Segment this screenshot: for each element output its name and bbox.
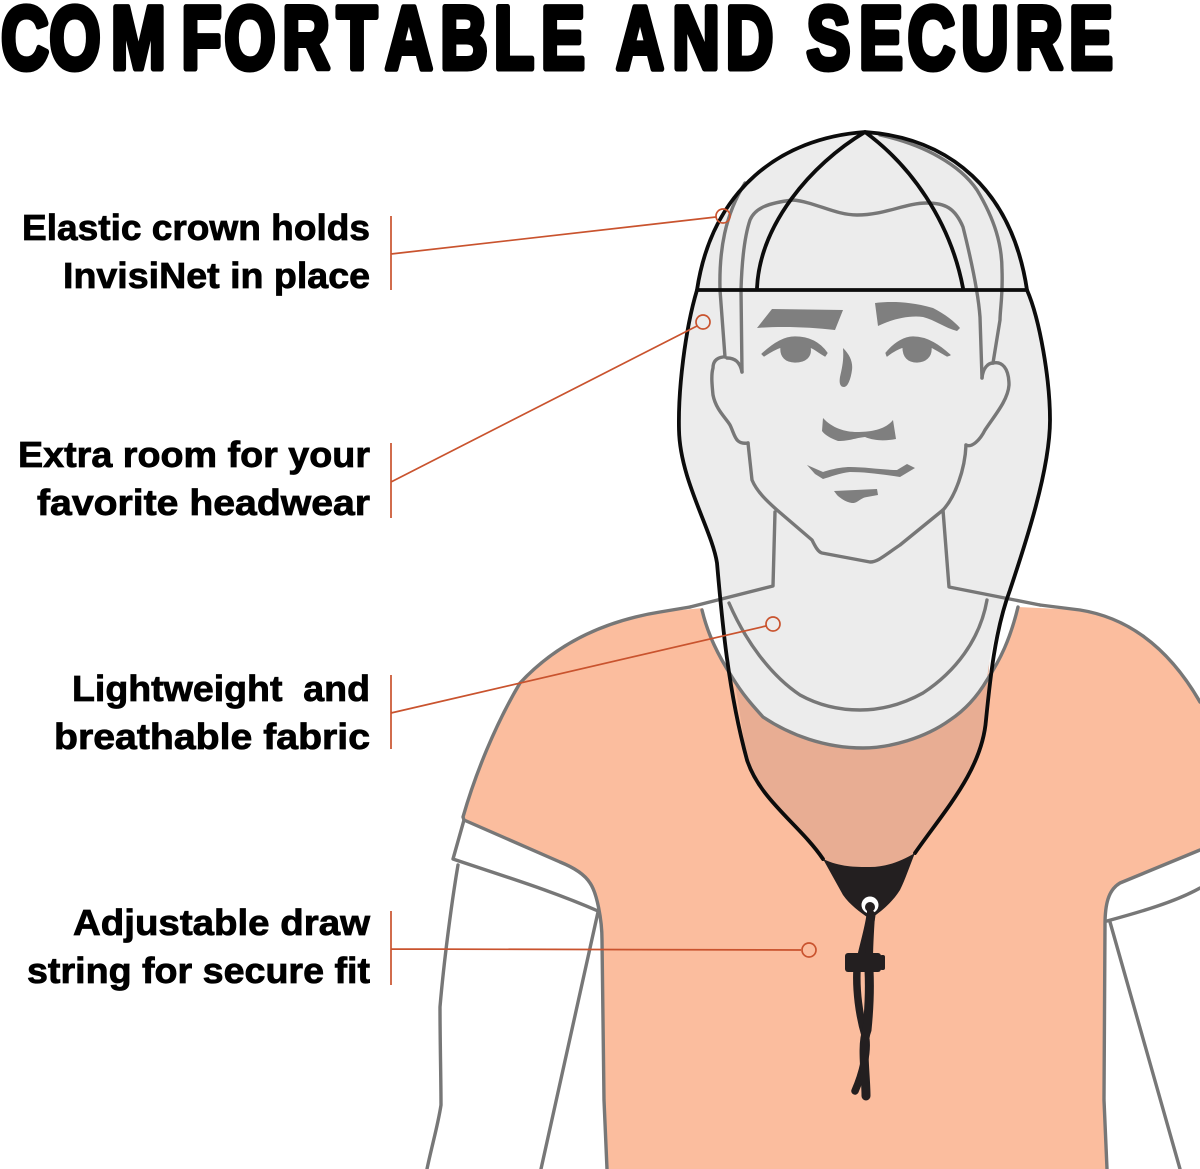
- label: draw string: string for secure fit: [27, 950, 370, 991]
- label: lightweight fabric: [54, 668, 370, 757]
- nose: [822, 348, 896, 441]
- label: extra room: favorite headwear: [37, 482, 370, 523]
- drawstring cord: [855, 915, 871, 1096]
- neck and shoulder lines: [690, 510, 1040, 710]
- label: draw string: [27, 902, 371, 991]
- label: lightweight fabric: breathable fabric: [54, 716, 370, 757]
- drawstring pouch: [823, 853, 915, 917]
- head net fill: [679, 132, 1050, 748]
- face outline: [712, 135, 1009, 562]
- label: elastic crown: InvisiNet in place: [63, 255, 370, 296]
- callout: draw string: [391, 911, 816, 985]
- net crown seams and outline: [679, 132, 1050, 859]
- cord toggle: [845, 953, 885, 972]
- label: elastic crown: Elastic crown holds: [22, 207, 370, 248]
- label: draw string: Adjustable draw: [73, 902, 371, 943]
- right eye: [886, 337, 950, 362]
- t-shirt: [463, 607, 1200, 1169]
- callout: elastic crown: [391, 209, 730, 290]
- label: lightweight fabric: Lightweight and: [72, 668, 370, 709]
- callout: extra room: [391, 315, 710, 518]
- tinted fabric over shirt: [730, 650, 990, 875]
- eyebrows: [757, 302, 960, 331]
- arms and sleeve bands: [427, 820, 1200, 1169]
- label: extra room: [18, 434, 370, 523]
- label: elastic crown: [22, 207, 370, 296]
- callout: lightweight fabric: [391, 617, 780, 749]
- title: [1, 0, 1113, 88]
- left eye: [762, 337, 827, 362]
- label: extra room: Extra room for your: [18, 434, 370, 475]
- shirt outline: [463, 605, 1200, 1169]
- collar: [702, 607, 1018, 748]
- eyelet: [862, 896, 878, 916]
- illustration: man wearing head net: [427, 132, 1200, 1169]
- mouth: [807, 464, 915, 503]
